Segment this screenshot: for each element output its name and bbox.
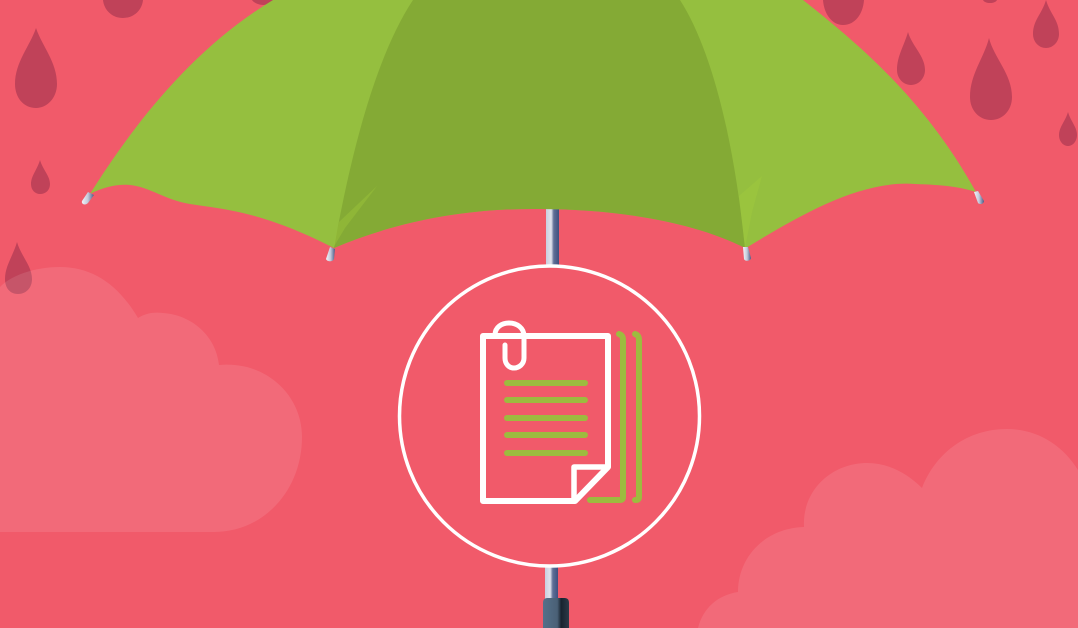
cloud: left: [0, 267, 302, 532]
umbrella shaft: lower: [545, 567, 558, 600]
canopy: centre dark panel: [334, 0, 745, 248]
umbrella tip: inner left: [326, 247, 335, 261]
cloud: right: [698, 429, 1078, 628]
back pages: [590, 334, 639, 500]
umbrella shaft: upper: [546, 205, 559, 265]
umbrella tip: far right: [974, 191, 984, 204]
paperclip: [495, 323, 524, 368]
front page with folded corner: [483, 336, 608, 501]
umbrella tip: inner right: [743, 247, 751, 261]
umbrella canopy: [82, 0, 984, 261]
canopy: outer green panels: [90, 0, 976, 248]
page fold: [574, 467, 608, 501]
white circle badge: [400, 266, 700, 566]
text lines: [507, 383, 585, 453]
canopy: left seam highlight: [333, 186, 377, 248]
canopy: right seam highlight: [739, 176, 762, 248]
icon: stacked documents: [483, 323, 639, 501]
raindrops: [5, 0, 1077, 294]
umbrella tip: far left: [82, 192, 94, 204]
umbrella handle: [543, 598, 569, 628]
